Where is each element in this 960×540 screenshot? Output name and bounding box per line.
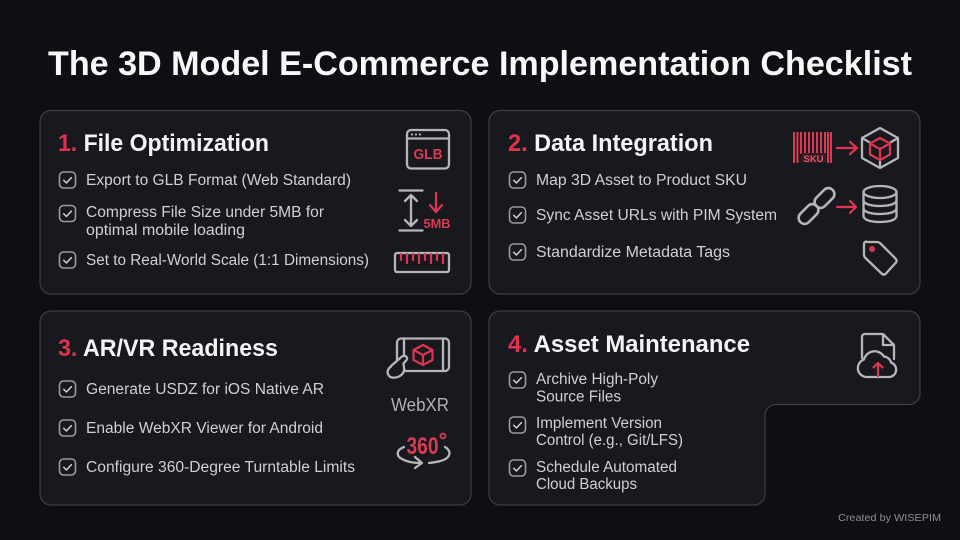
- icon: chain link: [796, 186, 837, 226]
- arrow: SKU to cube: [837, 142, 857, 154]
- icon: GLB window: GLB: [414, 147, 442, 163]
- checklist: data integration: Standardize Metadata Tags: [536, 244, 730, 261]
- checklist: AR/VR readiness: Generate USDZ for iOS Native AR: [86, 381, 324, 398]
- checklist: file optimization: [60, 172, 369, 269]
- checklist: asset maintenance: Source Files: [536, 388, 621, 406]
- checklist: file optimization: Export to GLB Format (Web Standard): [86, 172, 351, 189]
- icon: file size reduction: [400, 190, 450, 231]
- checklist: AR/VR readiness: Enable WebXR Viewer for Android: [86, 420, 323, 437]
- checklist: data integration: Map 3D Asset to Product SKU: [536, 172, 747, 189]
- checklist: asset maintenance: [510, 371, 683, 493]
- checklist: AR/VR readiness: [60, 381, 355, 476]
- panel: file optimization: [40, 110, 471, 294]
- panel: data integration: [489, 110, 920, 294]
- icon: SKU barcode: [794, 132, 831, 165]
- arrow: link to database: [837, 201, 856, 213]
- heading: asset maintenance: 4. Asset Maintenance: [508, 331, 750, 358]
- checklist: file optimization: Set to Real-World Scale (1:1 Dimensions): [86, 252, 369, 269]
- checklist: asset maintenance: Archive High-Poly: [536, 371, 658, 388]
- credit: Created by WISEPIM: [838, 512, 941, 524]
- icon: 360 degree rotation: 360: [406, 433, 438, 460]
- checklist: data integration: Sync Asset URLs with PIM System: [536, 207, 777, 224]
- panel: asset maintenance: [489, 311, 920, 505]
- icon: 360 degree rotation: [398, 433, 449, 468]
- checklist: asset maintenance: Schedule Automated: [536, 459, 677, 476]
- icon label: WebXR: WebXR: [391, 395, 449, 415]
- icon: database: [864, 186, 896, 222]
- checklist: asset maintenance: Cloud Backups: [536, 476, 637, 493]
- icon: GLB window: [407, 130, 449, 168]
- panel: AR/VR readiness: [40, 311, 471, 505]
- heading: AR/VR readiness: 3. AR/VR Readiness: [58, 335, 278, 362]
- checklist: file optimization: optimal mobile loading: [86, 222, 245, 239]
- checklist: asset maintenance: Control (e.g., Git/LFS): [536, 432, 683, 449]
- icon: tablet with hand and cube: [388, 338, 449, 378]
- title: The 3D Model E-Commerce Implementation Checklist: [48, 45, 912, 83]
- heading: file optimization: 1. File Optimization: [58, 130, 269, 157]
- icon: 3D cube hexagon: [862, 128, 898, 168]
- checklist: data integration: [510, 172, 777, 261]
- icon: ruler: [395, 253, 449, 272]
- icon: tag: [864, 242, 897, 275]
- icon: file size reduction: 5MB: [424, 216, 450, 231]
- icon: SKU barcode: SKU: [804, 154, 824, 165]
- icon: file with cloud upload: [858, 334, 896, 377]
- checklist: AR/VR readiness: Configure 360-Degree Turntable Limits: [86, 459, 355, 476]
- checklist: file optimization: Compress File Size under 5MB for: [86, 204, 324, 221]
- heading: data integration: 2. Data Integration: [508, 130, 713, 157]
- checklist: asset maintenance: Implement Version: [536, 415, 662, 432]
